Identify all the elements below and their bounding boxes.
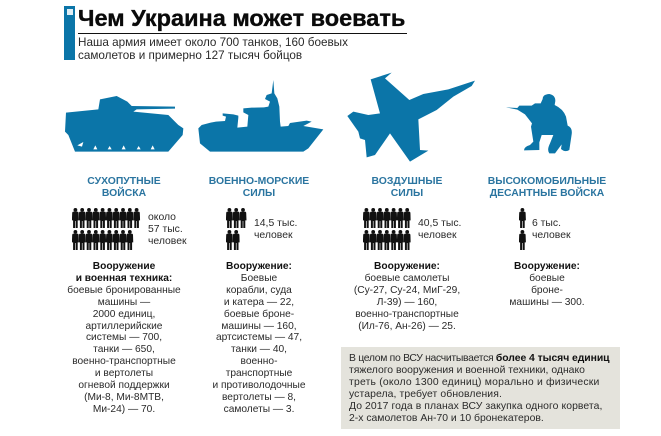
headcount: land forces: человек [148,236,187,247]
heading: air assault forces [488,176,606,199]
callout text: 2-х самолетов Ан-70 и 10 бронекатеров. [349,413,544,424]
equipment: land forces: военно-транспортные [72,356,176,367]
equipment: air force [354,261,460,332]
equipment: land forces: и военная техника: [76,273,172,284]
equipment: land forces: артиллерийские [86,321,162,332]
icon: fighter jet [347,73,475,162]
heading: navy: ВОЕННО-МОРСКИЕ [209,176,309,187]
headcount: air assault forces: 6 тыс. [532,218,561,229]
equipment: navy: транспортные [226,368,292,379]
subtitle: самолетов и примерно 127 тысяч бойцов [78,49,302,62]
subtitle [78,36,348,62]
callout text [349,353,610,424]
callout text: устарела, требует обновления. [349,389,502,400]
heading: air assault forces: ДЕСАНТНЫЕ ВОЙСКА [490,188,604,199]
equipment: air assault forces: боевые [529,273,565,284]
panel: navy [209,176,309,415]
equipment: navy: корабли, суда [226,285,292,296]
equipment: navy [212,261,306,415]
heading: navy: СИЛЫ [243,188,275,199]
equipment: navy: Вооружение: [226,261,292,272]
icon: tank [65,96,183,152]
icons row [65,72,572,162]
equipment: land forces: танки — 650, [93,344,155,355]
equipment: air assault forces: машины — 300. [509,297,585,308]
equipment: air force: (Ил-76, Ан-26) — 25. [358,321,456,332]
headcount: navy: 14,5 тыс. [254,218,297,229]
heading: land forces: ВОЙСКА [102,188,146,199]
accent bar [64,6,75,60]
equipment: navy: и противолодочные [212,380,306,391]
callout text: тяжелого вооружения и военной техники, однако [349,365,585,376]
headcount: air force: 40,5 тыс. [418,218,461,229]
people pictogram: land forces [72,208,140,250]
equipment: navy: военно- [241,356,277,367]
equipment: navy: Боевые [241,273,277,284]
equipment: land forces: и вертолеты [95,368,153,379]
equipment: navy: самолеты — 3. [224,404,294,415]
panel: air force [354,176,461,332]
equipment: air force: Л-39) — 160, [377,297,437,308]
heading: land forces [87,176,161,199]
equipment: navy: танки — 40, [231,344,287,355]
heading: air assault forces: ВЫСОКОМОБИЛЬНЫЕ [488,176,606,187]
icon: ship [198,80,323,152]
equipment: land forces: (Ми-8, Ми-8МТВ, [84,392,164,403]
equipment: air force: Вооружение: [374,261,440,272]
equipment: navy: и катера — 22, [224,297,294,308]
equipment: navy: боевые броне- [224,309,294,320]
equipment: navy: вертолеты — 8, [222,392,296,403]
equipment: air assault forces: Вооружение: [514,261,580,272]
equipment: air force: (Су-27, Су-24, МиГ-29, [354,285,460,296]
headcount: air force: человек [418,230,457,241]
heading: air force [372,176,442,199]
headcount: air assault forces [532,218,571,241]
heading: Чем Украина может воевать [78,5,405,31]
heading: air force: СИЛЫ [391,188,423,199]
equipment: land forces: огневой поддержки [78,380,170,391]
heading rule [78,33,407,34]
subtitle: Наша армия имеет около 700 танков, 160 боевых [78,36,348,49]
callout text: треть (около 1300 единиц) морально и физически [349,377,600,388]
heading: navy [209,176,309,199]
heading: land forces: СУХОПУТНЫЕ [87,176,161,187]
equipment: navy: артсистемы — 47, [216,332,302,343]
headcount: land forces: 57 тыс. [148,224,183,235]
equipment: land forces: машины — [98,297,150,308]
equipment: land forces: системы — 700, [86,332,162,343]
people pictogram: air force [363,208,411,250]
heading: air force: ВОЗДУШНЫЕ [372,176,442,187]
equipment: land forces: Ми-24) — 70. [93,404,155,415]
callout: summary [341,347,620,429]
equipment: land forces [67,261,181,415]
title block [64,5,407,62]
panel: air assault forces [488,176,606,308]
equipment: land forces: 2000 единиц, [93,309,155,320]
equipment: land forces: Вооружение [93,261,155,272]
equipment: navy: машины — 160, [221,321,297,332]
equipment: air assault forces [509,261,585,308]
headcount: navy: человек [254,230,293,241]
icon: kneeling soldier [506,94,572,153]
panel: land forces [67,176,187,415]
equipment: air assault forces: броне- [531,285,563,296]
headcount: land forces [148,212,187,247]
headcount: air force [418,218,461,241]
equipment: air force: боевые самолеты [365,273,449,284]
people pictogram: navy [226,208,246,250]
equipment: land forces: боевые бронированные [67,285,181,296]
equipment: air force: военно-транспортные [355,309,459,320]
callout text: В целом по ВСУ насчитывается более 4 тысяч единиц [349,353,610,364]
callout text: До 2017 года в планах ВСУ закупка одного корвета, [349,401,602,412]
people pictogram: air assault forces [519,208,526,250]
headcount: navy [254,218,297,241]
headcount: land forces: около [148,212,176,223]
headcount: air assault forces: человек [532,230,571,241]
